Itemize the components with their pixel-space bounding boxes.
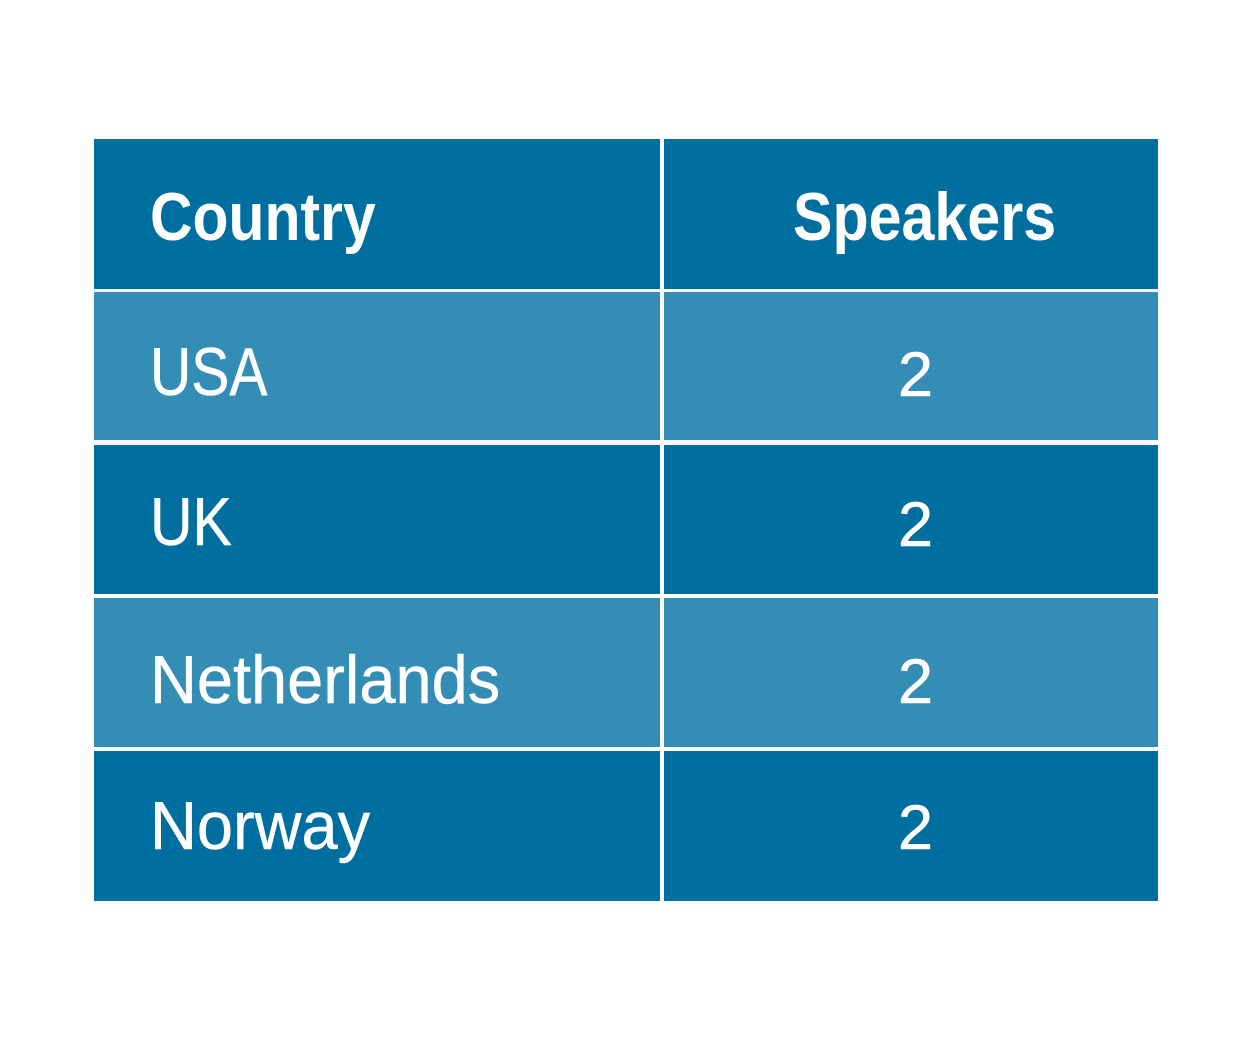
row label: UK bbox=[94, 445, 660, 594]
row value: Netherlands speakers bbox=[664, 598, 1158, 747]
row label: UK: UK bbox=[150, 484, 232, 560]
row label: Netherlands: Netherlands bbox=[150, 642, 500, 718]
header cell: Speakers: Speakers bbox=[793, 179, 1056, 255]
header cell: Country bbox=[94, 139, 660, 289]
header cell: Speakers bbox=[664, 139, 1158, 289]
row label: Netherlands bbox=[94, 598, 660, 747]
row value: UK speakers bbox=[664, 445, 1158, 594]
row label: Norway: Norway bbox=[150, 788, 370, 864]
header cell: Country: Country bbox=[150, 179, 376, 255]
row label: USA: USA bbox=[150, 334, 267, 410]
row value: USA speakers: 2 bbox=[898, 340, 933, 410]
row value: Norway speakers: 2 bbox=[898, 793, 933, 863]
table bbox=[94, 139, 1158, 901]
row value: UK speakers: 2 bbox=[898, 490, 933, 560]
row value: Norway speakers bbox=[664, 751, 1158, 901]
row value: Netherlands speakers: 2 bbox=[898, 647, 933, 717]
row value: USA speakers bbox=[664, 292, 1158, 440]
row label: USA bbox=[94, 292, 660, 440]
row label: Norway bbox=[94, 751, 660, 901]
